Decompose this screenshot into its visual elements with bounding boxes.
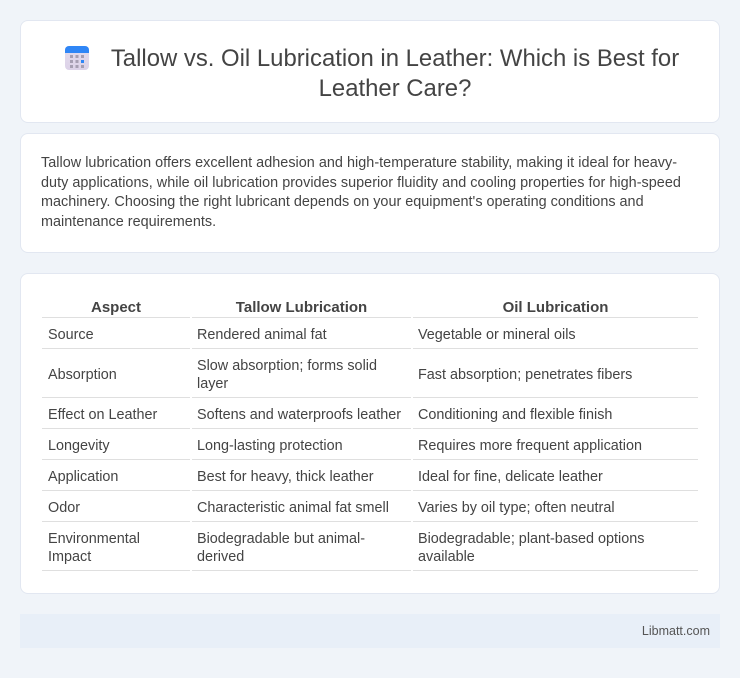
cell: Softens and waterproofs leather [197, 407, 401, 423]
row: Environmental Impact: Environmental [48, 531, 140, 547]
cell: Slow absorption; forms solid [197, 358, 377, 374]
cell: available [418, 549, 475, 565]
cell: Fast absorption; penetrates fibers [418, 367, 632, 383]
cell: Characteristic animal fat smell [197, 500, 389, 516]
cell: Rendered animal fat [197, 327, 327, 343]
cell: Best for heavy, thick leather [197, 469, 374, 485]
row: Environmental Impact: Impact [48, 549, 91, 565]
comparison table [42, 299, 698, 571]
summary text: maintenance requirements. [41, 214, 216, 230]
footer bar [20, 614, 720, 648]
cell: layer [197, 376, 228, 392]
header: Tallow Lubrication: Tallow Lubrication [236, 299, 367, 316]
title [111, 45, 679, 102]
row: Longevity: Longevity [48, 438, 110, 454]
row: Absorption: Absorption [48, 367, 117, 383]
cell: Biodegradable but animal- [197, 531, 365, 547]
panel: comparison table card [20, 273, 720, 594]
header: Aspect: Aspect [91, 299, 141, 316]
title: Leather Care? [319, 75, 471, 102]
cell: Biodegradable; plant-based options [418, 531, 644, 547]
cell [197, 358, 377, 392]
footer text: Libmatt.com [642, 624, 710, 638]
row: Source: Source [48, 327, 94, 343]
cell: Long-lasting protection [197, 438, 343, 454]
icon: calendar [65, 46, 89, 70]
title: Tallow vs. Oil Lubrication in Leather: Which is Best for [111, 45, 679, 72]
summary text: duty applications, while oil lubrication provides superior fluidity and cooling properties for high-speed [41, 175, 681, 191]
row: Application: Application [48, 469, 118, 485]
cell: derived [197, 549, 244, 565]
cell [197, 531, 365, 565]
cell: Ideal for fine, delicate leather [418, 469, 603, 485]
summary text: machinery. Choosing the right lubricant depends on your equipment's operating conditions and [41, 194, 644, 210]
row: Environmental Impact [48, 531, 140, 565]
header: Oil Lubrication: Oil Lubrication [503, 299, 608, 316]
cell: Varies by oil type; often neutral [418, 500, 615, 516]
cell: Vegetable or mineral oils [418, 327, 576, 343]
panel: title card [20, 20, 720, 123]
cell [418, 531, 644, 565]
row: Effect on Leather: Effect on Leather [48, 407, 157, 423]
row: Odor: Odor [48, 500, 80, 516]
summary text: Tallow lubrication offers excellent adhesion and high-temperature stability, making it ideal for heavy- [41, 155, 677, 171]
cell: Requires more frequent application [418, 438, 642, 454]
panel: summary card [20, 133, 720, 253]
summary text [41, 155, 681, 230]
cell: Conditioning and flexible finish [418, 407, 612, 423]
